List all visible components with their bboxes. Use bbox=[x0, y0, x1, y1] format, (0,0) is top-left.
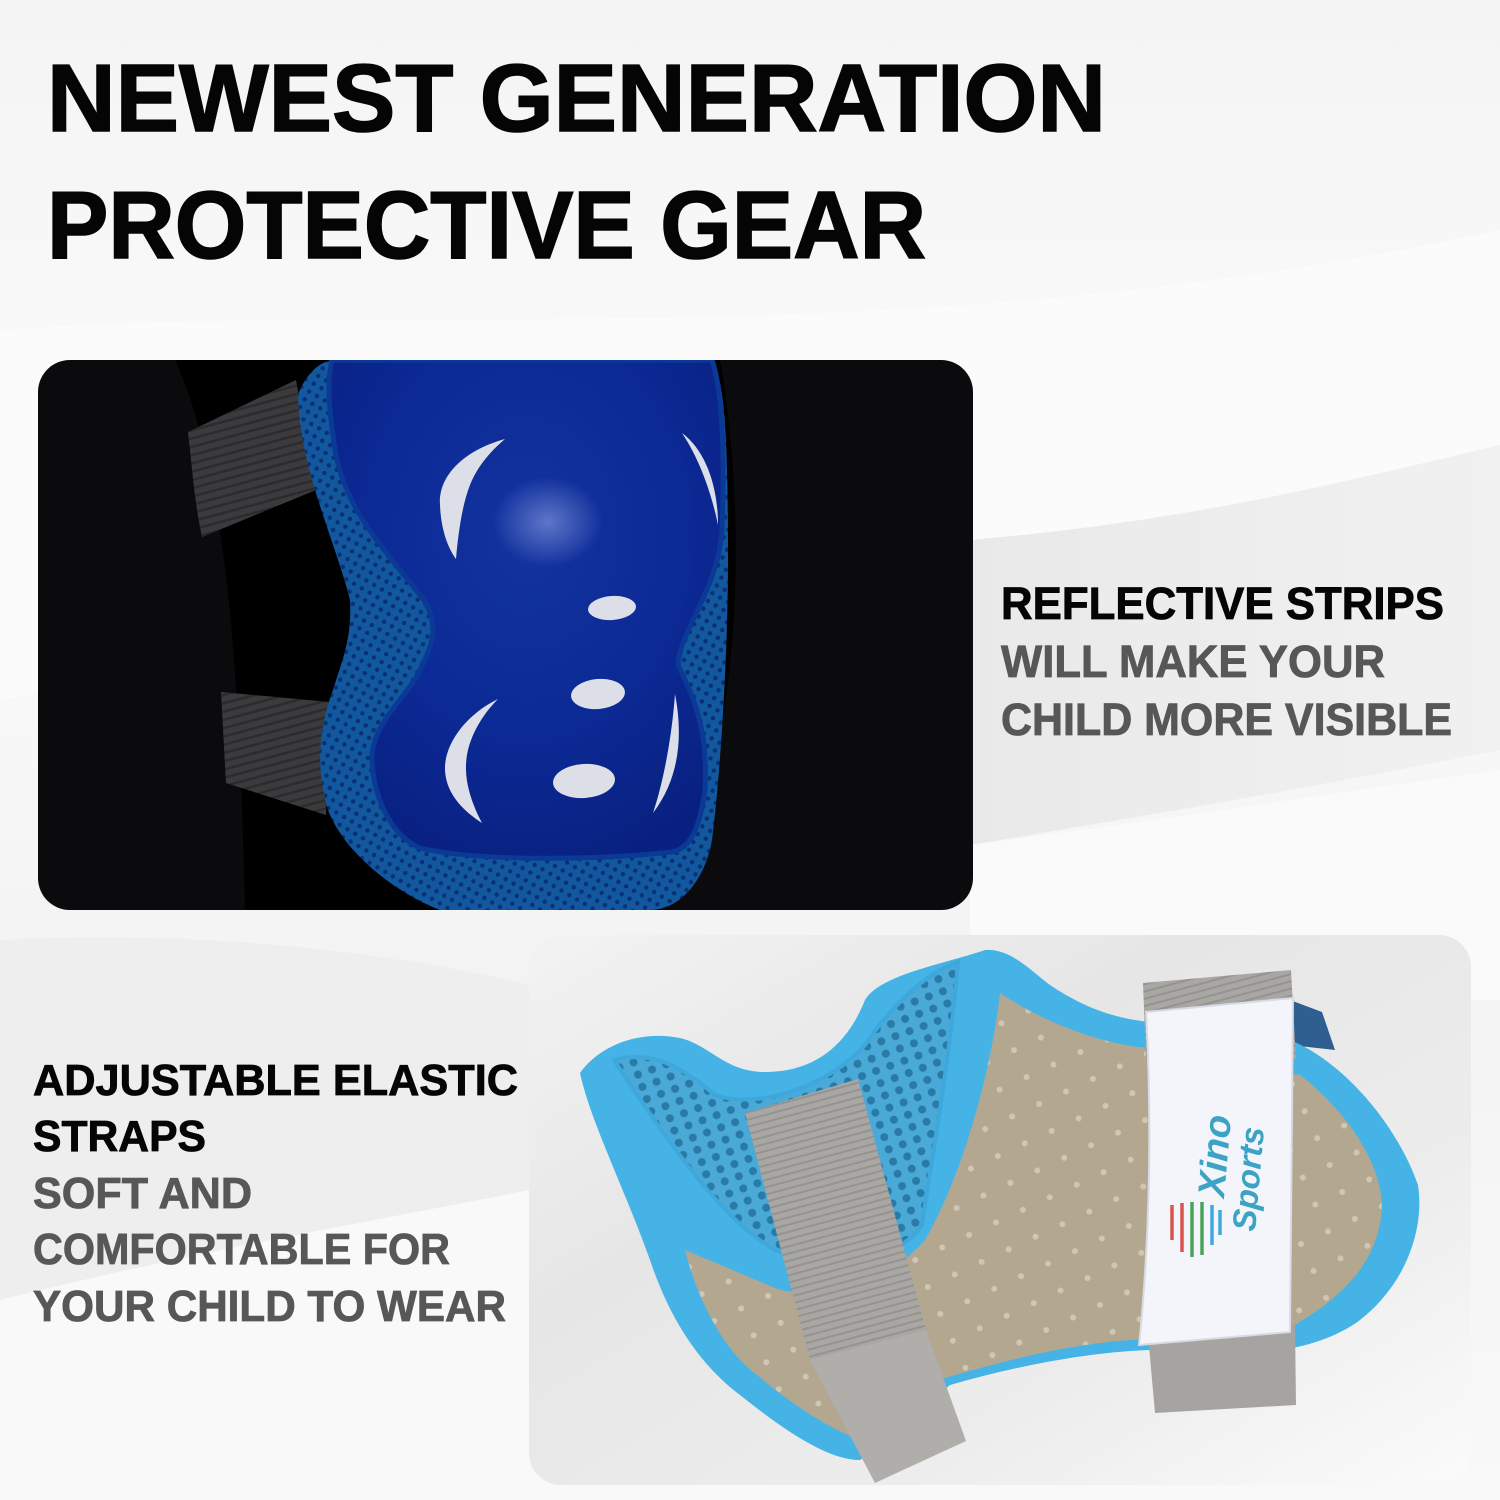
icon: knee pad blue shell bbox=[329, 360, 723, 858]
icon: knee cap highlight bbox=[499, 482, 597, 562]
icon: knee pad mesh backing bbox=[298, 360, 728, 910]
icon: logo stripes bbox=[1172, 1202, 1220, 1257]
title: PROTECTIVE GEAR bbox=[47, 172, 926, 279]
text block: adjustable elastic straps: ADJUSTABLE ELASTIC bbox=[33, 1056, 518, 1105]
text block: reflective strips: CHILD MORE VISIBLE bbox=[1001, 694, 1452, 745]
icon: upper elastic strap bbox=[188, 380, 316, 537]
icon: inner beige lining bbox=[685, 993, 1382, 1440]
logo text: Xino bbox=[1191, 1113, 1240, 1201]
title bbox=[47, 45, 1106, 279]
text block: reflective strips bbox=[1001, 578, 1452, 745]
text block: reflective strips: WILL MAKE YOUR bbox=[1001, 636, 1385, 687]
text block: adjustable elastic straps: SOFT AND bbox=[33, 1169, 252, 1218]
text block: adjustable elastic straps: COMFORTABLE FOR bbox=[33, 1225, 450, 1274]
text block: adjustable elastic straps: STRAPS bbox=[33, 1112, 206, 1161]
icon: white brand label: Sports bbox=[1225, 1125, 1271, 1233]
icon: left elastic strap bbox=[745, 1079, 966, 1483]
icon: right strap bbox=[1143, 970, 1296, 1413]
icon: reflective strips bbox=[440, 433, 718, 823]
icon: wrist guard blue binding bbox=[580, 950, 1419, 1460]
text block: reflective strips: REFLECTIVE STRIPS bbox=[1001, 578, 1444, 629]
panel: knee pad photo bbox=[38, 360, 973, 910]
panel: wrist guard photo bbox=[529, 935, 1471, 1485]
icon: white brand label bbox=[1139, 998, 1293, 1345]
icon: back strap end bbox=[1294, 1002, 1335, 1050]
icon: lower elastic strap bbox=[221, 692, 330, 815]
icon: mesh panel bbox=[614, 962, 958, 1261]
text block: adjustable elastic straps bbox=[33, 1056, 518, 1331]
title: NEWEST GENERATION bbox=[47, 45, 1106, 152]
text block: adjustable elastic straps: YOUR CHILD TO WEAR bbox=[33, 1282, 506, 1331]
